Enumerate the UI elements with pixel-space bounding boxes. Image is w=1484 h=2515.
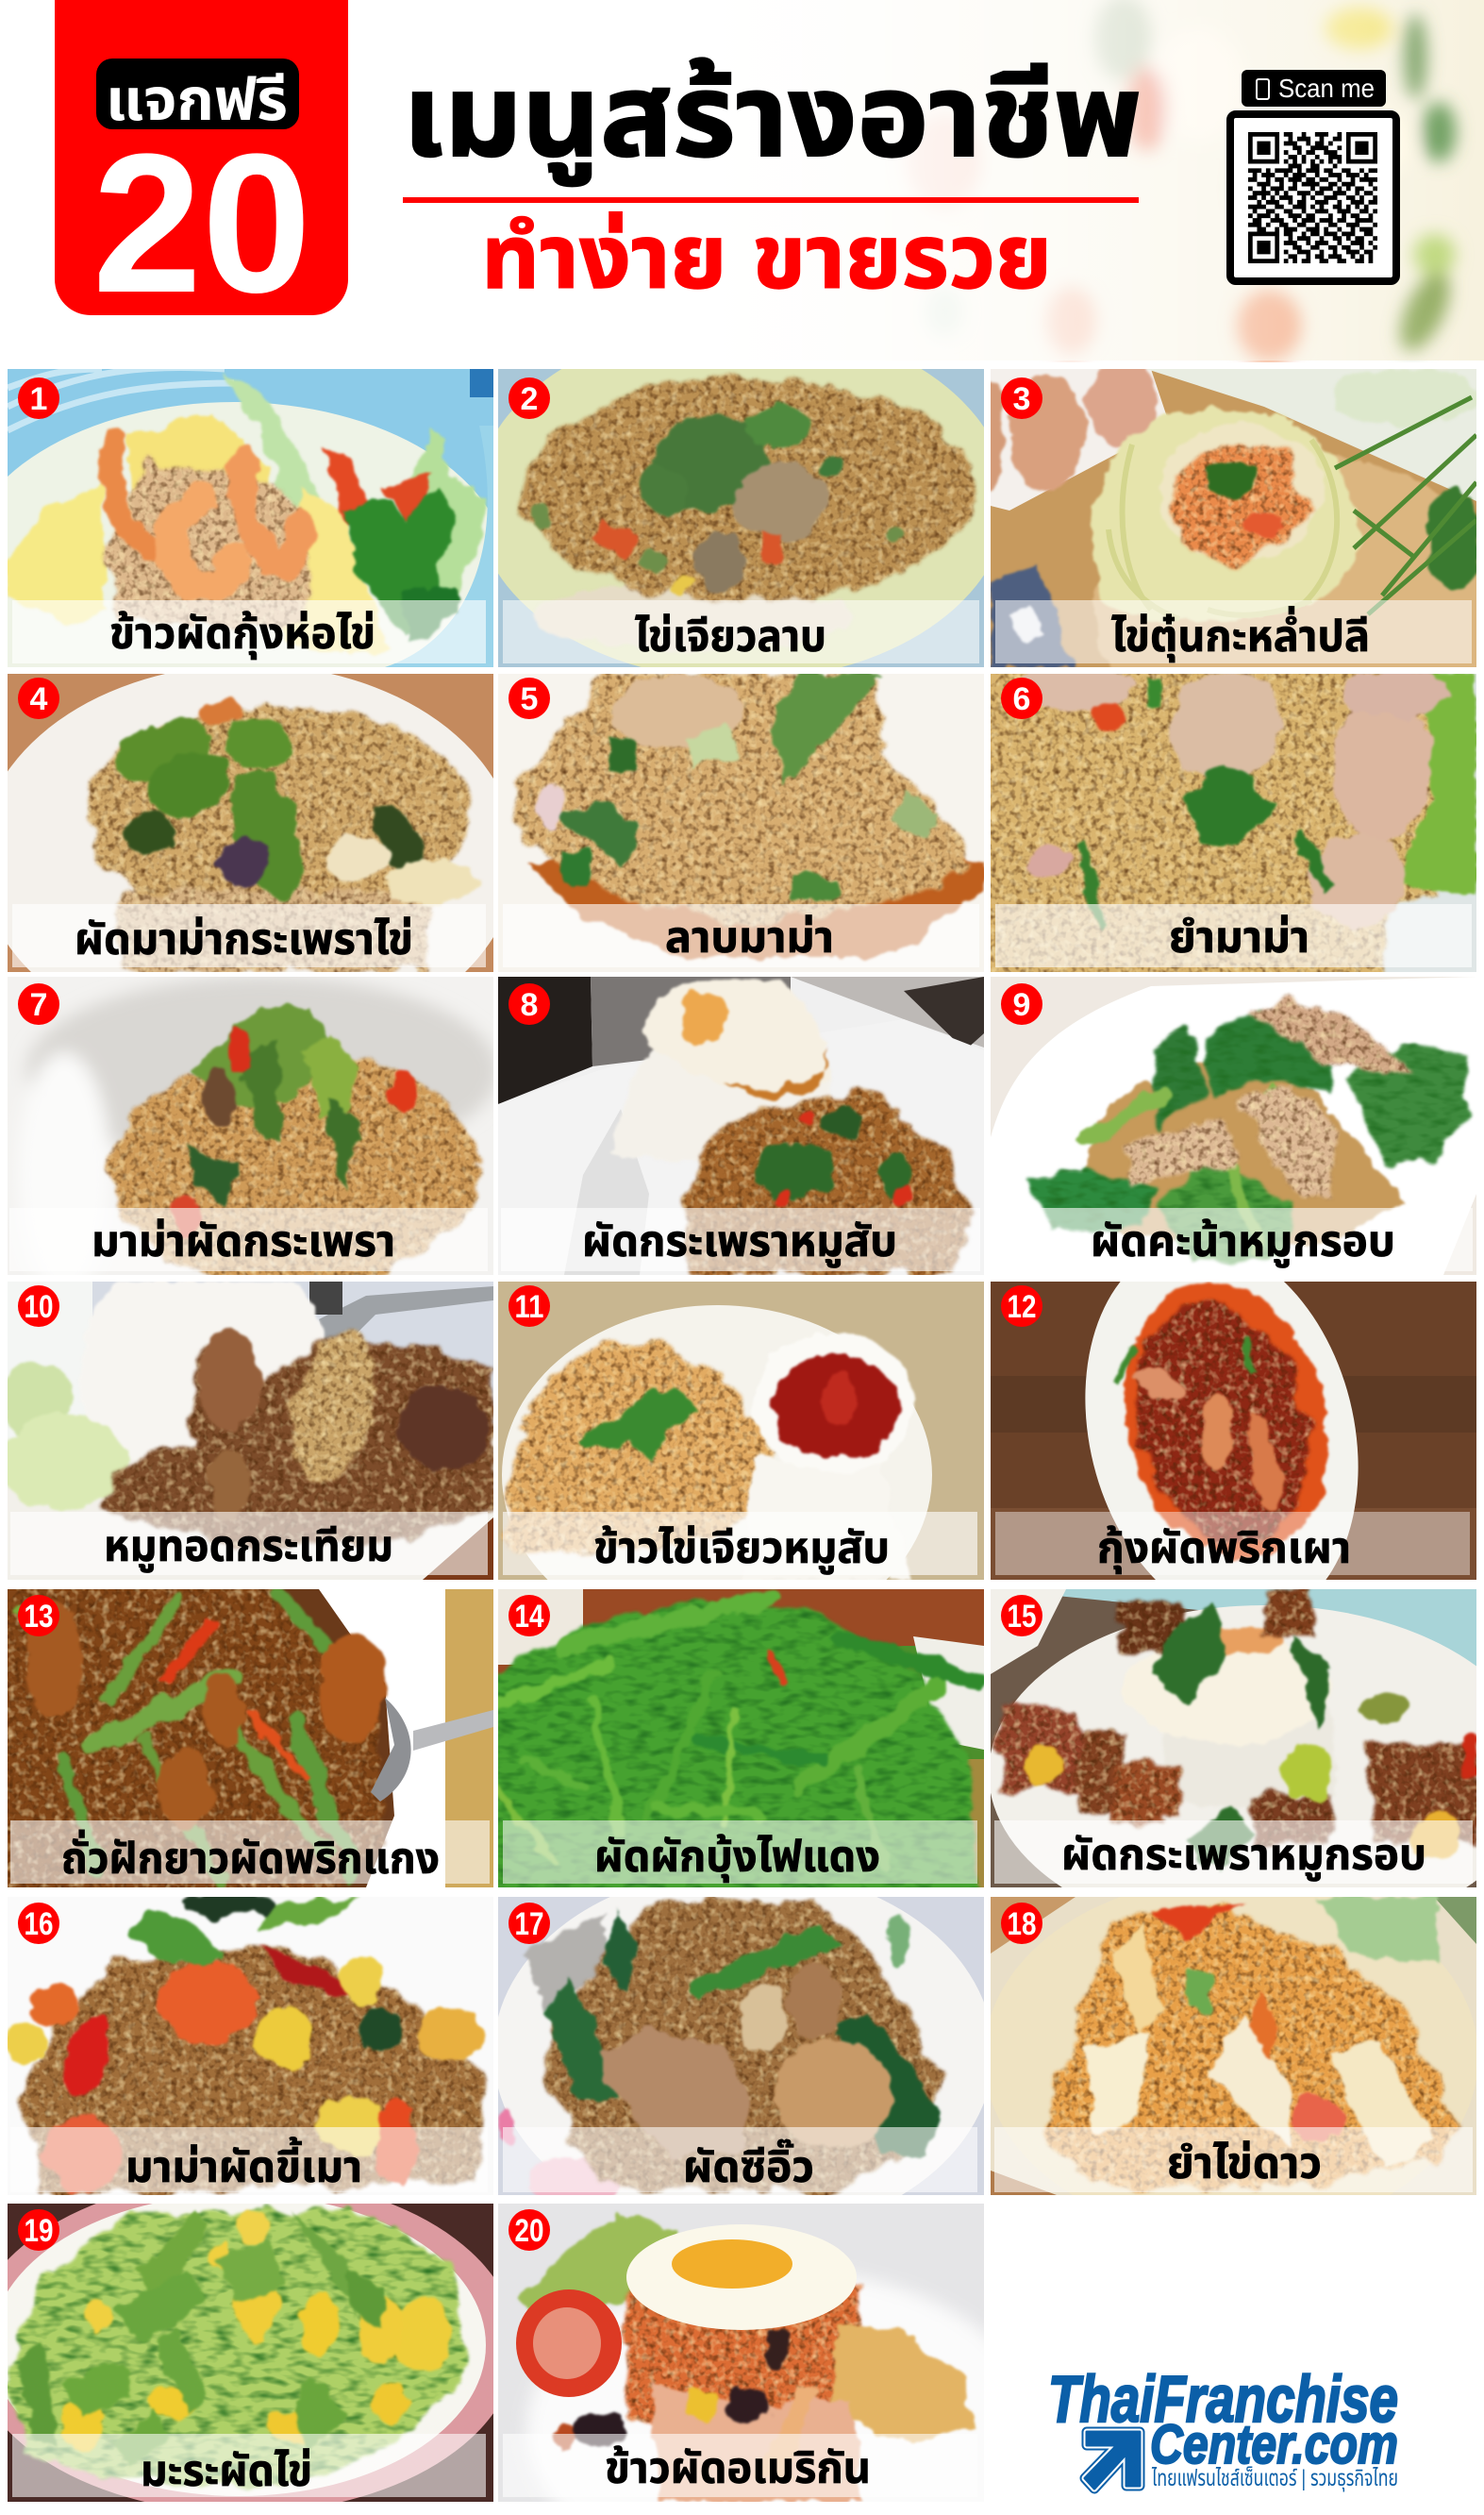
panel: dish 12 [991, 1282, 1476, 1580]
title: เมนูสร้างอาชีพ [403, 52, 1142, 187]
panel: dish 20 [498, 2204, 984, 2502]
black pill: แจกฟรี: แจกฟรี [106, 68, 288, 133]
caption [995, 904, 1472, 967]
caption [501, 1208, 980, 1271]
photo: bitter gourd with egg [0, 2177, 517, 2513]
caption: มะระผัดไข่ [141, 2446, 312, 2495]
number badge [18, 678, 59, 719]
caption: ข้าวผัดกุ้งห่อไข่ [109, 609, 375, 660]
caption: หมูทอดกระเทียม [104, 1521, 393, 1572]
number badge: 1 [30, 381, 47, 417]
number badge [509, 377, 550, 419]
number badge [18, 983, 59, 1025]
caption: ยำมาม่า [1169, 913, 1309, 962]
number badge: 18 [1008, 1906, 1036, 1942]
caption [995, 1512, 1470, 1575]
red panel [55, 0, 348, 315]
caption: ผัดกระเพราหมูกรอบ [1061, 1830, 1426, 1881]
photo: yum mama salad [972, 654, 1476, 985]
photo: drunken mama noodles [6, 1891, 493, 2195]
photo: fried egg salad [984, 1878, 1478, 2237]
caption: ผัดคะน้าหมูกรอบ [1091, 1216, 1395, 1267]
photo: shrimp stir-fried with chili paste [991, 1213, 1476, 1652]
number badge: 6 [1013, 681, 1030, 717]
caption: มาม่าผัดกระเพรา [92, 1216, 395, 1266]
big number 20: 20 [92, 112, 311, 334]
number badge: 3 [1013, 381, 1030, 417]
panel: dish 10 [8, 1282, 493, 1580]
number badge: 4 [30, 681, 48, 717]
number badge: 16 [25, 1906, 53, 1942]
subtitle: ทำง่าย ขายรวย [481, 208, 1052, 307]
panel: dish 11 [498, 1282, 984, 1580]
number badge: 8 [521, 987, 538, 1023]
panel: dish 8 [498, 977, 984, 1275]
photo: mama stir-fried with holy basil [8, 977, 498, 1298]
caption [10, 2127, 488, 2192]
caption [12, 904, 486, 967]
photo: steamed egg in cabbage [975, 361, 1484, 768]
caption [503, 904, 979, 967]
caption [503, 1820, 977, 1884]
photo: long beans with red curry paste [0, 1580, 493, 1901]
header background: faded fried rice photo [708, 0, 1484, 361]
caption [994, 2127, 1473, 2192]
photo: stir-fried basil minced pork with rice and egg [498, 977, 984, 1275]
photo: pad see ew [493, 1869, 993, 2237]
number badge: 17 [515, 1906, 543, 1942]
caption: ผัดซีอิ๊ว [683, 2139, 814, 2191]
caption: มาม่าผัดขี้เมา [125, 2137, 362, 2191]
caption [503, 600, 979, 663]
number badge: 20 [515, 2213, 543, 2249]
panel: dish 15 [991, 1589, 1476, 1887]
caption [993, 1208, 1473, 1271]
QR code [1230, 114, 1396, 281]
caption [9, 1208, 488, 1271]
number badge [18, 377, 59, 419]
panel: dish 19 [8, 2204, 493, 2502]
photo: larb mama noodles [498, 674, 984, 972]
panel: dish 9 [991, 977, 1476, 1275]
panel: dish 7 [8, 977, 493, 1275]
caption [995, 600, 1472, 663]
caption: ผัดกระเพราหมูสับ [582, 1216, 897, 1267]
panel: dish 18 [991, 1897, 1476, 2195]
panel: dish 2 [498, 369, 984, 667]
caption: ถั่วฝักยาวผัดพริกแกง [61, 1830, 440, 1883]
caption [12, 2434, 486, 2497]
panel: dish 5 [498, 674, 984, 972]
panel: dish 1 [8, 369, 493, 667]
number badge [1001, 377, 1042, 419]
number badge [1001, 678, 1042, 719]
panel: dish 6 [991, 674, 1476, 1922]
panel: dish 4 [8, 674, 493, 972]
panel: dish 14 [498, 1589, 984, 1887]
number badge: 2 [521, 381, 538, 417]
photo: shrimp fried rice in omelette [0, 367, 508, 742]
caption [10, 1512, 488, 1575]
photo: American fried rice [498, 2204, 1036, 2515]
photo: stir-fried mama noodles with basil and egg [0, 664, 517, 1051]
photo: rice with minced pork omelette [498, 1282, 984, 1645]
photo: stir-fried basil crispy pork with rice and egg [989, 1589, 1484, 1941]
photo: morning glory stir-fry [489, 1589, 984, 1901]
red divider [403, 197, 1139, 203]
panel: dish 13 [8, 1589, 493, 1887]
header banner [55, 0, 1484, 362]
panel: dish 3 [991, 369, 1476, 667]
caption: ผัดมาม่ากระเพราไข่ [75, 914, 413, 964]
number badge: 15 [1008, 1599, 1036, 1635]
caption: ผัดผักบุ้งไฟแดง [594, 1832, 880, 1883]
panel: dish 17 [498, 1897, 984, 2195]
number badge: 7 [30, 987, 47, 1023]
caption: ไข่เจียวลาบ [635, 612, 826, 661]
caption [994, 1820, 1473, 1884]
caption [12, 600, 486, 663]
logo: ThaiFranchise Center.com [1048, 2364, 1398, 2493]
number badge [509, 678, 550, 719]
photo: stir-fried kale with crispy pork [991, 977, 1476, 1275]
icon: logo arrow [1085, 2432, 1140, 2489]
number badge [1001, 983, 1042, 1025]
number badge: 14 [515, 1599, 544, 1635]
photo: garlic fried pork with rice [0, 1282, 493, 1580]
number badge [509, 983, 550, 1025]
caption: ไข่ตุ๋นกะหล่ำปลี [1111, 606, 1370, 662]
caption [503, 1512, 977, 1575]
caption: ลาบมาม่า [665, 913, 834, 962]
caption: กุ้งผัดพริกเผา [1097, 1523, 1351, 1574]
number badge: 19 [25, 2213, 53, 2249]
number badge: 11 [515, 1289, 543, 1325]
caption: ยำไข่ดาว [1167, 2138, 1322, 2188]
caption [503, 2127, 977, 2192]
number badge: 9 [1013, 987, 1030, 1023]
caption: ข้าวผัดอเมริกัน [605, 2443, 871, 2492]
number badge: 13 [25, 1599, 53, 1635]
caption: ข้าวไข่เจียวหมูสับ [593, 1523, 890, 1574]
photo: larb omelette [475, 322, 1008, 680]
panel: dish 16 [8, 1897, 490, 2195]
number badge: 10 [25, 1289, 53, 1325]
scan me tag: Scan me [1278, 74, 1375, 103]
scan me tag [1242, 70, 1386, 107]
caption [503, 2434, 977, 2497]
caption [10, 1820, 490, 1884]
number badge: 5 [521, 681, 538, 717]
number badge: 12 [1008, 1289, 1036, 1325]
